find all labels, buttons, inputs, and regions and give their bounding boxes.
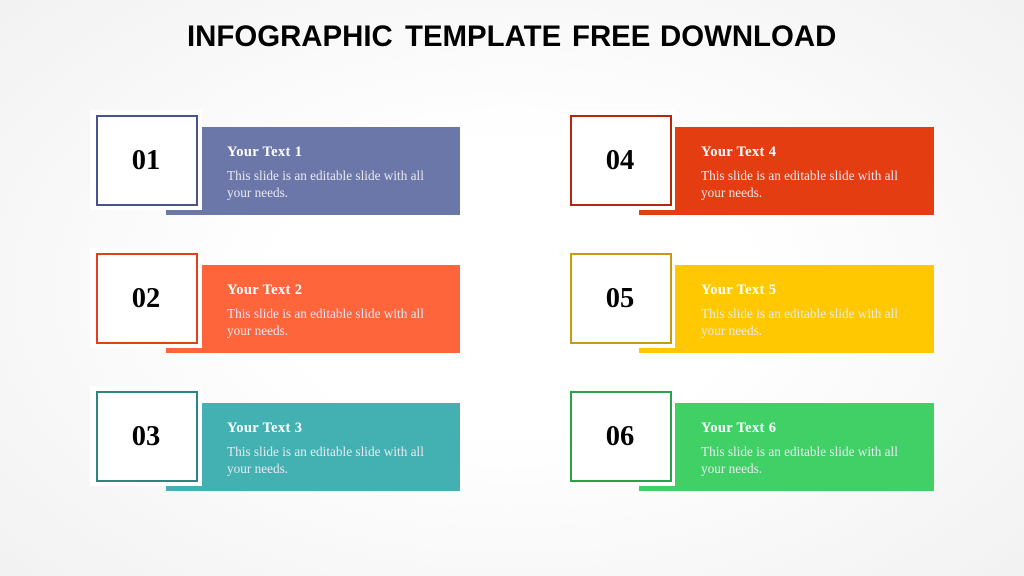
text block 6: your needs. — [701, 461, 762, 476]
title: DOWNLOAD — [660, 20, 836, 53]
number 01: 01 — [132, 145, 160, 176]
title — [187, 20, 836, 53]
number 06: 06 — [606, 421, 634, 452]
panel: item 01 — [96, 115, 460, 215]
text block 5: your needs. — [701, 323, 762, 338]
panel: item 06 — [570, 391, 934, 491]
text block 2: This slide is an editable slide with all — [227, 306, 424, 321]
number 05: 05 — [606, 283, 634, 314]
text block 1 — [227, 168, 424, 200]
text block 5 — [701, 306, 898, 338]
panel: item 05 — [570, 253, 934, 353]
title: INFOGRAPHIC — [187, 20, 393, 53]
text block 4 — [701, 168, 898, 200]
title: FREE — [572, 20, 650, 53]
title: TEMPLATE — [405, 20, 561, 53]
text block 6 — [701, 444, 898, 476]
text block 1: your needs. — [227, 185, 288, 200]
text block 1: This slide is an editable slide with all — [227, 168, 424, 183]
text block 6: This slide is an editable slide with all — [701, 444, 898, 459]
text block 3: your needs. — [227, 461, 288, 476]
number 03: 03 — [132, 421, 160, 452]
number 04: 04 — [606, 145, 634, 176]
text block 3: This slide is an editable slide with all — [227, 444, 424, 459]
heading: Your Text 5: Your Text 5 — [701, 282, 776, 298]
heading: Your Text 1: Your Text 1 — [227, 144, 302, 160]
panel: item 02 — [96, 253, 460, 353]
text block 2 — [227, 306, 424, 338]
heading: Your Text 3: Your Text 3 — [227, 420, 302, 436]
text block 2: your needs. — [227, 323, 288, 338]
heading: Your Text 6: Your Text 6 — [701, 420, 776, 436]
text block 4: your needs. — [701, 185, 762, 200]
text block 5: This slide is an editable slide with all — [701, 306, 898, 321]
number 02: 02 — [132, 283, 160, 314]
heading: Your Text 4: Your Text 4 — [701, 144, 776, 160]
panel: item 03 — [90, 391, 460, 491]
heading: Your Text 2: Your Text 2 — [227, 282, 302, 298]
panel: item 04 — [570, 115, 934, 215]
text block 3 — [227, 444, 424, 476]
text block 4: This slide is an editable slide with all — [701, 168, 898, 183]
